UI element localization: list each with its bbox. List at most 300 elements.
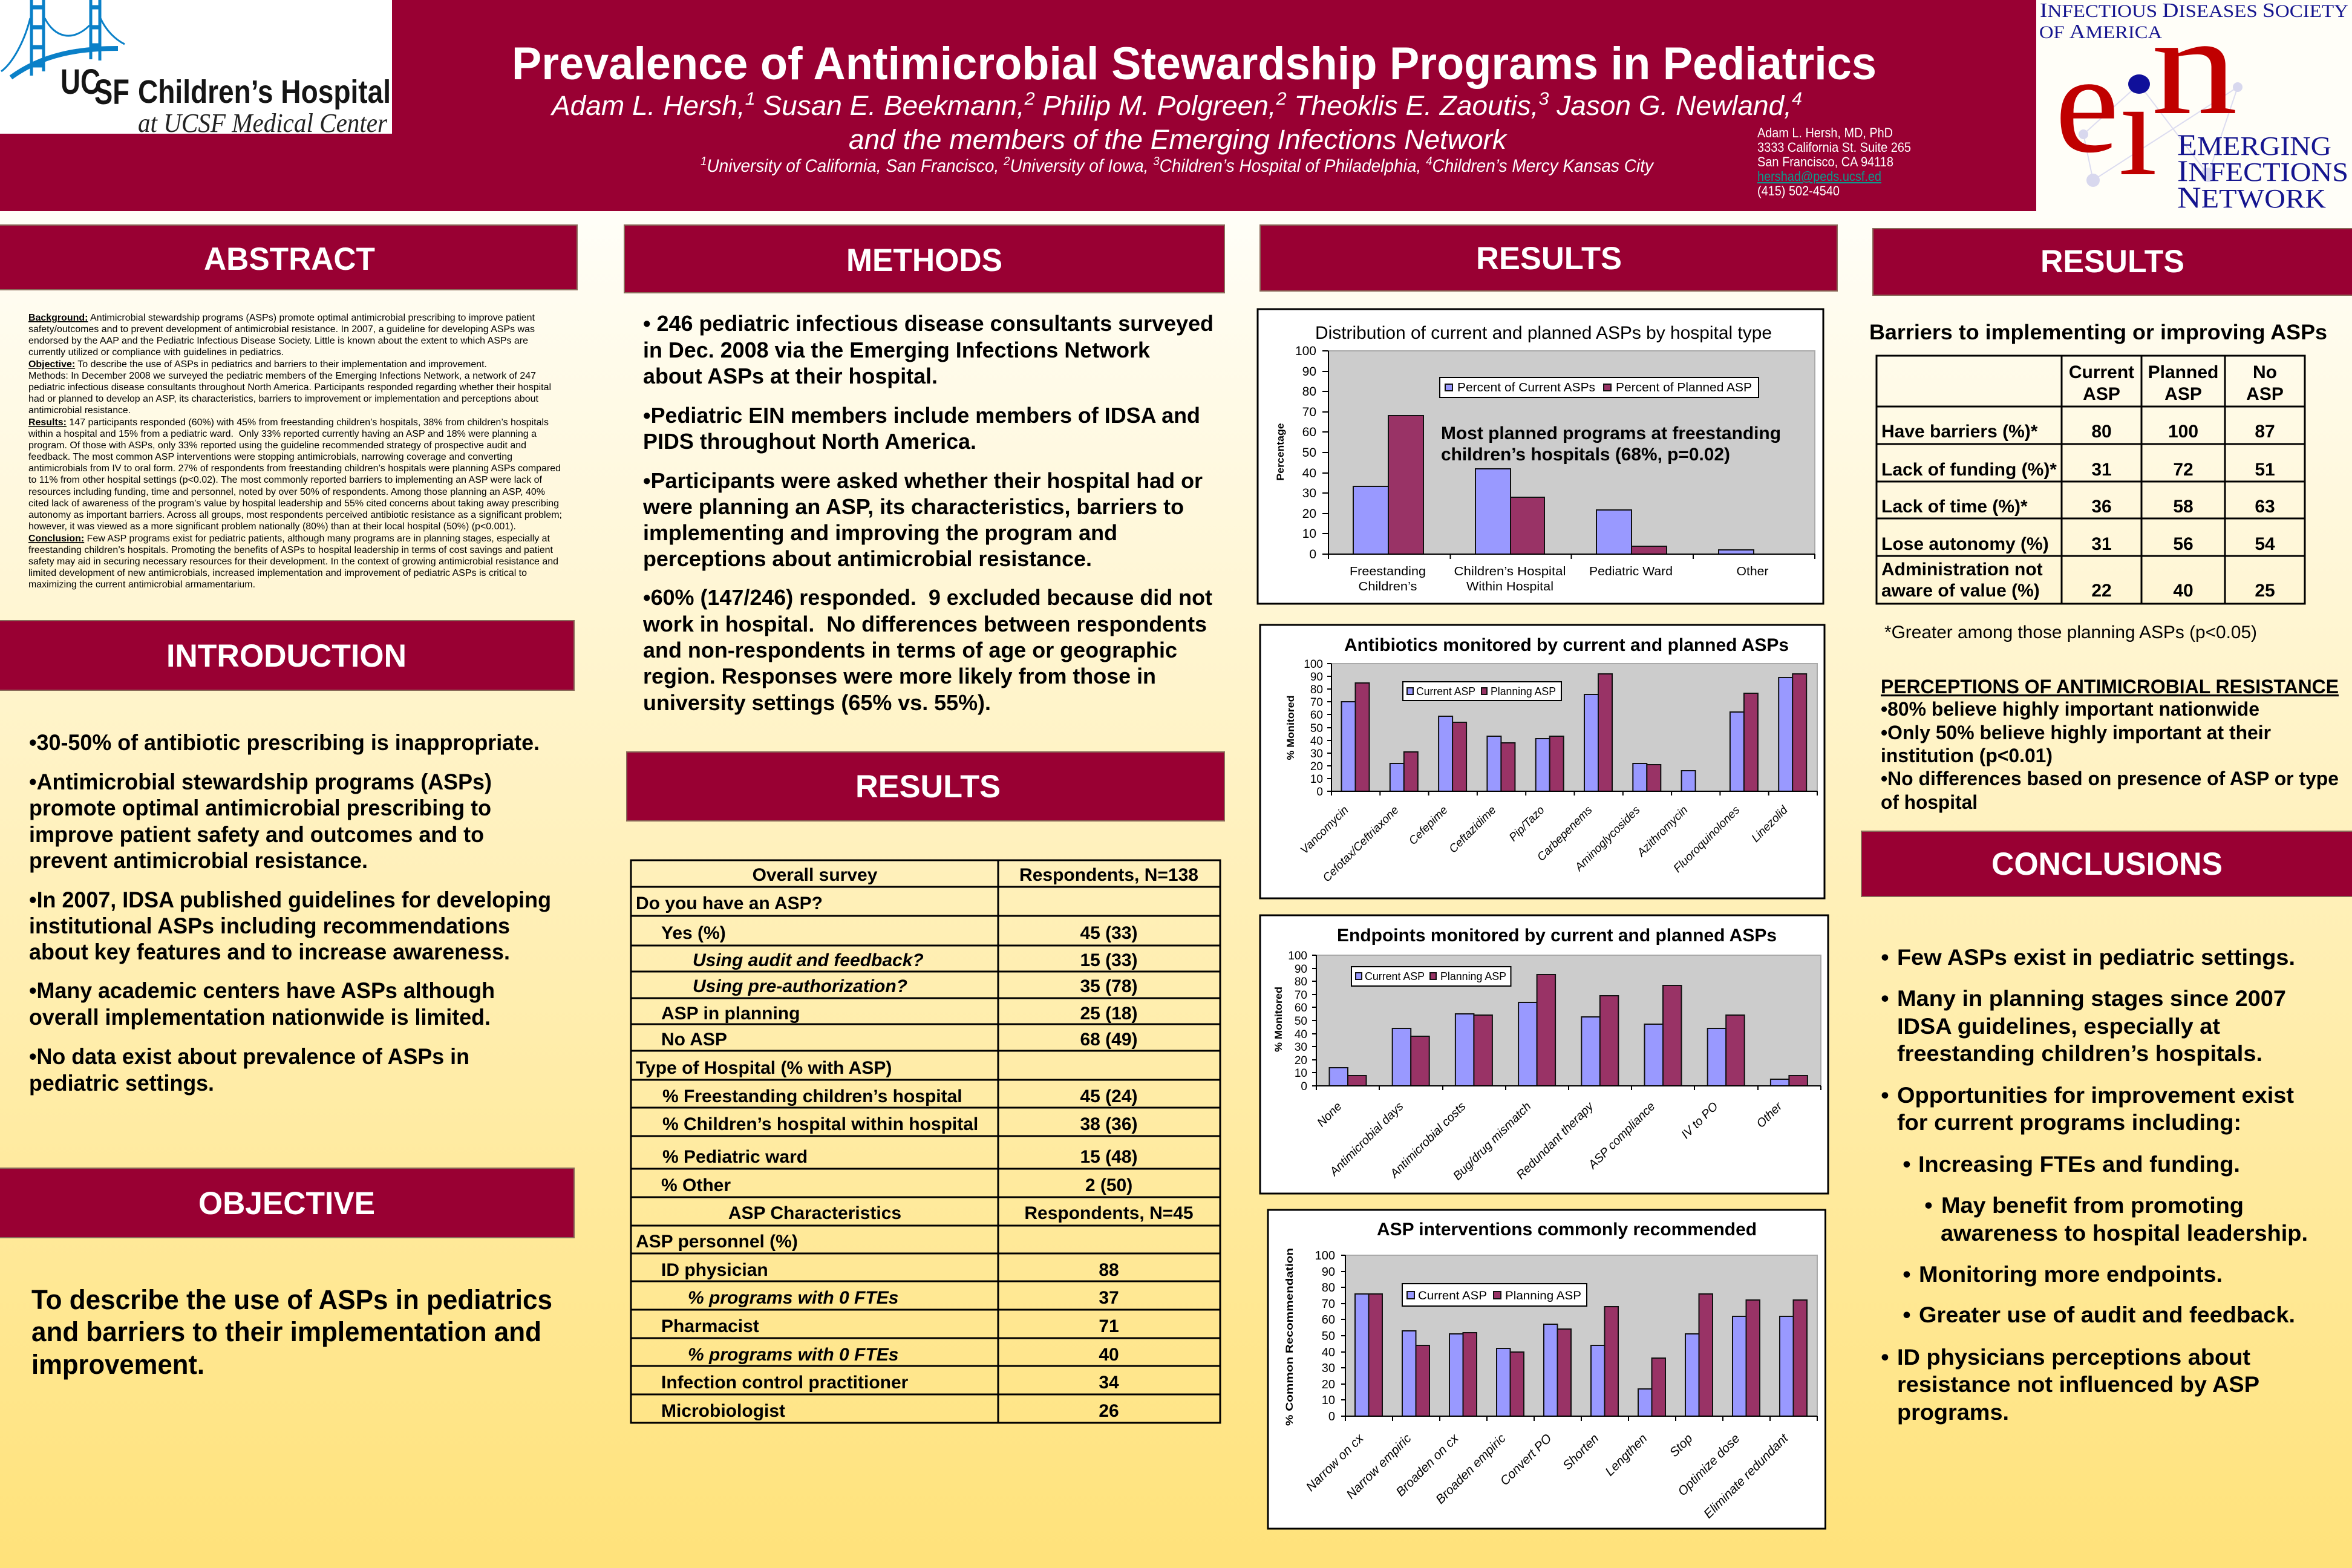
conclusions bullets: awareness to hospital leadership. — [1941, 1220, 2308, 1246]
panel: results heading, charts column — [1260, 225, 1837, 291]
contact details — [1757, 125, 1911, 198]
methods bullets: implementing and improving the program and — [643, 520, 1117, 545]
conclusions bullets: • — [1881, 985, 1889, 1011]
chart: distribution by hospital type: 90 — [1302, 365, 1316, 379]
table: overall survey and ASP characteristics: ASP Characteristics — [728, 1203, 901, 1223]
introduction bullets: •In 2007, IDSA published guidelines for developing — [29, 887, 551, 912]
chart: endpoints monitored: 40 — [1295, 1028, 1307, 1041]
chart: ASP interventions commonly recommended: 70 — [1322, 1298, 1335, 1311]
table: overall survey and ASP characteristics: 35 (78) — [1080, 976, 1138, 996]
methods bullets: university settings (65% vs. 55%). — [643, 690, 991, 715]
table: barriers: Lose autonomy (%) — [1881, 534, 2049, 554]
table: overall survey and ASP characteristics: % Other — [661, 1175, 731, 1195]
conclusions bullets: freestanding children’s hospitals. — [1897, 1040, 2262, 1066]
chart: endpoints monitored: 70 — [1295, 989, 1307, 1002]
chart: distribution by hospital type: 40 — [1302, 466, 1316, 480]
chart: distribution by hospital type: Most planned programs at freestanding — [1441, 423, 1781, 443]
header banner — [0, 0, 2036, 211]
panel: results heading, survey table — [627, 752, 1224, 821]
affiliations: University of Iowa, — [1010, 156, 1153, 176]
logo: UCSF Children's Hospital — [0, 0, 392, 138]
table: overall survey and ASP characteristics: 45 (33) — [1080, 923, 1138, 943]
chart: ASP interventions commonly recommended: Narrow empiric — [1344, 1431, 1414, 1501]
panel: abstract heading — [0, 225, 577, 290]
methods bullets: •60% (147/246) responded. 9 excluded because did not — [643, 585, 1212, 610]
abstract text block: pediatric infectious disease consultants throughout North America. Participants responded regarding whether their hospital — [28, 382, 551, 393]
chart: distribution by hospital type: 70 — [1302, 405, 1316, 419]
abstract text block: currently utilized or compliance with guidelines in pediatrics. — [28, 347, 284, 358]
title: Prevalence of Antimicrobial Stewardship Programs in Pediatrics — [512, 38, 1877, 90]
chart: antibiotics monitored: Cefotax/Ceftriaxone — [1321, 804, 1402, 884]
chart: distribution by hospital type: Other — [1736, 565, 1769, 578]
chart: endpoints monitored: 20 — [1295, 1054, 1307, 1067]
affiliations: 4 — [1426, 155, 1432, 168]
abstract text block: limited development of new antimicrobials, increased implementation and improvement of pediatric ASPs is critical to — [28, 568, 527, 578]
chart: antibiotics monitored: Aminoglycosides — [1572, 803, 1643, 874]
chart: antibiotics monitored: 50 — [1310, 722, 1323, 735]
table: overall survey and ASP characteristics: Using audit and feedback? — [693, 950, 924, 970]
table: overall survey and ASP characteristics: 26 — [1099, 1401, 1119, 1421]
conclusions bullets — [1881, 944, 2308, 1425]
chart: ASP interventions commonly recommended: Shorten — [1560, 1431, 1602, 1473]
table: barriers: Administration not — [1881, 560, 2043, 580]
chart: endpoints monitored: 80 — [1295, 976, 1307, 988]
chart: distribution by hospital type: Distribution of current and planned ASPs by hospital type — [1315, 323, 1772, 343]
icon: Golden Gate bridge — [1, 0, 125, 77]
table: overall survey and ASP characteristics: Microbiologist — [661, 1401, 785, 1421]
abstract text block: cited lack of awareness of the program’s value by hospital leadership and 55% cited concerns about taking away prescribing — [28, 498, 559, 509]
chart: ASP interventions commonly recommended: Planning ASP — [1505, 1290, 1581, 1302]
conclusions bullets: resistance not influenced by ASP — [1897, 1371, 2259, 1397]
chart: antibiotics monitored: 30 — [1310, 748, 1323, 760]
chart: endpoints monitored: IV to PO — [1679, 1100, 1721, 1142]
abstract text block: antimicrobial resistance. — [28, 405, 131, 416]
table footnote: *Greater among those planning ASPs (p<0.05) — [1884, 622, 2257, 642]
table: overall survey and ASP characteristics: 88 — [1099, 1260, 1119, 1280]
objective text: improvement. — [31, 1349, 204, 1380]
panel: introduction heading: INTRODUCTION — [166, 638, 407, 674]
table: overall survey and ASP characteristics: ID physician — [661, 1260, 768, 1280]
table: barriers: 36 — [2091, 497, 2112, 517]
objective text: and barriers to their implementation and — [31, 1316, 541, 1347]
methods bullets: region. Responses were more likely from those in — [643, 664, 1156, 688]
chart: antibiotics monitored: Ceftazidime — [1447, 804, 1499, 855]
conclusions bullets: • — [1881, 944, 1889, 970]
chart: ASP interventions commonly recommended: Lengthen — [1602, 1431, 1650, 1478]
abstract text block: Methods: In December 2008 we surveyed the pediatric members of the Emerging Infections Network, a network of 247 — [28, 371, 536, 381]
table: overall survey and ASP characteristics: 25 (18) — [1080, 1004, 1138, 1024]
table: barriers: Current — [2069, 362, 2134, 382]
chart: antibiotics monitored: % Monitored — [1285, 696, 1296, 760]
chart: endpoints monitored: Redundant therapy — [1514, 1099, 1596, 1182]
table: barriers: Lack of funding (%)* — [1881, 460, 2057, 480]
introduction bullets: •30-50% of antibiotic prescribing is inappropriate. — [29, 730, 540, 755]
chart: endpoints monitored: ASP compliance — [1586, 1100, 1658, 1172]
table: overall survey and ASP characteristics: 15 (33) — [1080, 950, 1138, 970]
table: overall survey and ASP characteristics: ASP personnel (%) — [636, 1232, 798, 1252]
affiliations: 3 — [1153, 155, 1160, 168]
abstract text block: freestanding children’s hospitals. Promoting the benefits of ASPs to hospital leadership in terms of cost savings and patient — [28, 545, 554, 555]
abstract text block: Objective: To describe the use of ASPs in pediatrics and barriers to their implementation and improvement. — [28, 359, 487, 370]
chart: distribution by hospital type: 0 — [1309, 547, 1316, 561]
abstract text block: autonomy as important barriers. Across all groups, most respondents perceived antibiotic resistance as a significant problem; — [28, 510, 562, 520]
chart: endpoints monitored: Endpoints monitored by current and planned ASPs — [1337, 926, 1777, 946]
table: overall survey and ASP characteristics: % programs with 0 FTEs — [688, 1345, 898, 1365]
conclusions bullets: Increasing FTEs and funding. — [1918, 1151, 2240, 1177]
chart: ASP interventions commonly recommended: Optimize dose — [1675, 1431, 1743, 1498]
table: overall survey and ASP characteristics: % Freestanding children’s hospital — [662, 1086, 962, 1106]
perceptions of antimicrobial resistance: •Only 50% believe highly important at their — [1881, 722, 2271, 743]
chart: ASP interventions commonly recommended: 100 — [1315, 1249, 1335, 1263]
methods bullets: about ASPs at their hospital. — [643, 364, 938, 388]
chart: ASP interventions commonly recommended: Current ASP — [1418, 1290, 1487, 1302]
table: barriers: ASP — [2164, 384, 2202, 404]
chart: antibiotics monitored: 60 — [1310, 709, 1323, 722]
abstract text block: safety may aid in securing necessary resources for their development. In the context of growing antimicrobial resistance and — [28, 557, 558, 567]
panel: conclusions heading: CONCLUSIONS — [1991, 846, 2223, 882]
conclusions bullets: Many in planning stages since 2007 — [1897, 985, 2286, 1011]
abstract text block: feedback. The most common ASP interventions were stopping antimicrobials, narrowing coverage and converting — [28, 452, 512, 462]
logo: IDSA and Emerging Infections Network: ı — [2118, 53, 2157, 204]
authors: 1 — [745, 89, 756, 109]
table: barriers: aware of value (%) — [1881, 581, 2040, 601]
table: overall survey and ASP characteristics: 34 — [1099, 1373, 1119, 1393]
table: overall survey and ASP characteristics: Type of Hospital (% with ASP) — [636, 1058, 892, 1078]
table: barriers: 63 — [2255, 497, 2275, 517]
abstract text block: safety/outcomes and to prevent development of antimicrobial resistance. In 2007, a guideline for developing ASPs was — [28, 324, 535, 335]
authors: Jason G. Newland, — [1549, 90, 1792, 121]
logo: UCSF Children's Hospital: at UCSF Medical Center — [138, 108, 388, 138]
table: overall survey and ASP characteristics: ASP in planning — [661, 1004, 800, 1024]
chart: distribution by hospital type: 30 — [1302, 486, 1316, 500]
chart: antibiotics monitored: Vancomycin — [1298, 804, 1351, 857]
table: barriers: 56 — [2173, 534, 2194, 554]
table: overall survey and ASP characteristics: 2 (50) — [1085, 1175, 1132, 1195]
chart: antibiotics monitored: Pip/Tazo — [1507, 804, 1547, 844]
contact details: San Francisco, CA 94118 — [1757, 154, 1893, 169]
panel: objective heading: OBJECTIVE — [198, 1186, 375, 1221]
abstract text block: had or planned to develop an ASP, its characteristics, barriers to improvement or implementation and perceptions about — [28, 394, 539, 404]
panel: results heading, barriers column: RESULTS — [2040, 244, 2184, 279]
affiliations: University of California, San Francisco, — [707, 156, 1004, 176]
chart: ASP interventions commonly recommended: Eliminate redundant — [1701, 1431, 1791, 1521]
contact details: hershad@peds.ucsf.ed — [1757, 169, 1881, 184]
chart: endpoints monitored: None — [1315, 1100, 1345, 1129]
table: overall survey and ASP characteristics: 68 (49) — [1080, 1030, 1138, 1050]
chart: endpoints monitored — [1260, 915, 1828, 1194]
chart: ASP interventions commonly recommended: Broaden empiric — [1433, 1431, 1509, 1507]
introduction bullets: pediatric settings. — [29, 1071, 214, 1096]
introduction bullets: •No data exist about prevalence of ASPs in — [29, 1044, 469, 1069]
chart: distribution by hospital type: Children’s Hospital — [1454, 565, 1566, 578]
chart: antibiotics monitored: 0 — [1316, 786, 1323, 799]
introduction bullets: institutional ASPs including recommendations — [29, 913, 510, 938]
authors: Adam L. Hersh, — [552, 90, 741, 121]
contact details: (415) 502-4540 — [1757, 183, 1840, 198]
introduction bullets: promote optimal antimicrobial prescribing to — [29, 795, 491, 820]
table: barriers: 31 — [2091, 534, 2112, 554]
logo: IDSA and Emerging Infections Network: OF AMERICA — [2039, 21, 2162, 43]
chart: distribution by hospital type: 60 — [1302, 425, 1316, 439]
table: overall survey and ASP characteristics: Respondents, N=45 — [1024, 1203, 1194, 1223]
conclusions bullets: Few ASPs exist in pediatric settings. — [1897, 944, 2295, 970]
perceptions of antimicrobial resistance: •No differences based on presence of ASP or type — [1881, 768, 2339, 789]
authors: Theoklis E. Zaoutis, — [1287, 90, 1538, 121]
introduction bullets: overall implementation nationwide is limited. — [29, 1005, 491, 1030]
table: barriers: Lack of time (%)* — [1881, 497, 2028, 517]
objective text: To describe the use of ASPs in pediatrics — [31, 1284, 552, 1315]
table: overall survey and ASP characteristics: % Pediatric ward — [662, 1147, 808, 1167]
conclusions bullets: • — [1903, 1151, 1911, 1177]
chart: distribution by hospital type: Freestanding — [1350, 565, 1426, 578]
chart: antibiotics monitored: Carbepenems — [1535, 803, 1595, 864]
chart: ASP interventions commonly recommended: 0 — [1328, 1410, 1335, 1423]
perceptions of antimicrobial resistance: PERCEPTIONS OF ANTIMICROBIAL RESISTANCE — [1881, 676, 2339, 697]
conclusions bullets: programs. — [1897, 1399, 2009, 1425]
affiliations: 1 — [701, 155, 707, 168]
abstract text block: Results: 147 participants responded (60%) with 45% from freestanding children’s hospitals, 38% from children’s hospitals — [28, 417, 549, 428]
methods bullets — [642, 311, 1214, 715]
introduction bullets: improve patient safety and outcomes and to — [29, 822, 484, 847]
introduction bullets: •Many academic centers have ASPs although — [29, 978, 495, 1003]
table: overall survey and ASP characteristics: Yes (%) — [661, 923, 726, 943]
introduction bullets: about key features and to increase awareness. — [29, 939, 510, 964]
table: barriers: Have barriers (%)* — [1881, 422, 2038, 442]
chart: antibiotics monitored — [1260, 625, 1824, 898]
methods bullets: • 246 pediatric infectious disease consultants surveyed — [643, 311, 1214, 336]
table: overall survey and ASP characteristics: 38 (36) — [1080, 1114, 1138, 1134]
chart: distribution by hospital type: 100 — [1295, 344, 1316, 358]
logo: IDSA and Emerging Infections Network: INFECTIOUS DISEASES SOCIETY — [2040, 0, 2348, 22]
conclusions bullets: • — [1924, 1192, 1933, 1218]
chart: antibiotics monitored: 10 — [1310, 773, 1323, 786]
panel: methods heading: METHODS — [846, 243, 1002, 278]
chart: antibiotics monitored: 80 — [1310, 684, 1323, 696]
abstract text block: resources including funding, time and personnel, noted by over 50% of respondents. Among those planning an ASP, 40% — [28, 487, 545, 497]
chart: ASP interventions commonly recommended: 40 — [1322, 1346, 1335, 1359]
chart: ASP interventions commonly recommended: 50 — [1322, 1330, 1335, 1343]
chart: endpoints monitored: Current ASP — [1365, 970, 1425, 982]
chart: antibiotics monitored: 100 — [1304, 658, 1323, 671]
table: barriers: ASP — [2083, 384, 2120, 404]
chart: ASP interventions commonly recommended: Narrow on cx — [1304, 1431, 1367, 1494]
conclusions bullets: Monitoring more endpoints. — [1919, 1261, 2223, 1287]
chart: endpoints monitored: Bug/drug mismatch — [1451, 1100, 1534, 1183]
chart: ASP interventions commonly recommended: 60 — [1322, 1313, 1335, 1327]
conclusions bullets: Greater use of audit and feedback. — [1919, 1302, 2295, 1327]
abstract text block: Background: Antimicrobial stewardship programs (ASPs) promote optimal antimicrobial prescribing to improve patient — [28, 313, 535, 323]
authors: 4 — [1792, 89, 1802, 109]
barriers heading: Barriers to implementing or improving ASPs — [1869, 321, 2327, 344]
table: overall survey and ASP characteristics: Respondents, N=138 — [1019, 865, 1198, 885]
affiliations: 2 — [1003, 155, 1010, 168]
chart: antibiotics monitored: Antibiotics monitored by current and planned ASPs — [1344, 635, 1789, 655]
chart: ASP interventions commonly recommended: Convert PO — [1498, 1431, 1555, 1488]
abstract text block: within a hospital and 15% from a pediatric ward. Only 33% reported currently having an ASP and 18% were planning a — [28, 429, 537, 439]
conclusions bullets: for current programs including: — [1897, 1109, 2241, 1135]
chart: distribution by hospital type: children’s hospitals (68%, p=0.02) — [1441, 445, 1730, 465]
abstract text block: antimicrobials from IV to oral form. 27% of respondents from freestanding children’s hospitals were planning ASPs compared — [28, 463, 561, 474]
chart: antibiotics monitored: 70 — [1310, 696, 1323, 709]
conclusions bullets: • — [1903, 1302, 1911, 1327]
table: barriers: 87 — [2255, 422, 2275, 442]
chart: distribution by hospital type: 20 — [1302, 507, 1316, 521]
methods bullets: in Dec. 2008 via the Emerging Infections Network — [643, 338, 1151, 362]
authors: Susan E. Beekmann, — [756, 90, 1025, 121]
perceptions of antimicrobial resistance — [1881, 676, 2339, 813]
chart: ASP interventions commonly recommended: 20 — [1322, 1378, 1335, 1391]
chart: distribution by hospital type: Pediatric Ward — [1589, 565, 1673, 578]
table: barriers: 100 — [2168, 422, 2198, 442]
objective text — [31, 1284, 552, 1380]
chart: distribution by hospital type — [1258, 309, 1823, 604]
chart: antibiotics monitored: Current ASP — [1416, 685, 1475, 697]
chart: distribution by hospital type: Percent of Planned ASP — [1616, 381, 1752, 394]
chart: endpoints monitored: Planning ASP — [1440, 970, 1506, 982]
methods bullets: PIDS throughout North America. — [643, 429, 976, 454]
methods bullets: work in hospital. No differences between respondents — [642, 612, 1207, 636]
affiliations: Children’s Mercy Kansas City — [1432, 156, 1655, 176]
table: overall survey and ASP characteristics: 45 (24) — [1080, 1086, 1138, 1106]
table: barriers: 31 — [2091, 460, 2112, 480]
panel: conclusions heading — [1861, 831, 2352, 897]
table: barriers: 40 — [2173, 581, 2194, 601]
chart: distribution by hospital type: Children’s — [1359, 580, 1417, 593]
perceptions of antimicrobial resistance: •80% believe highly important nationwide — [1881, 698, 2259, 720]
chart: ASP interventions commonly recommended: % Common Recommendation — [1284, 1248, 1295, 1426]
conclusions bullets: • — [1903, 1261, 1911, 1287]
table: overall survey and ASP characteristics — [631, 860, 1220, 1423]
logo: IDSA and Emerging Infections Network: NETWORK — [2177, 180, 2326, 214]
table: barriers: 51 — [2255, 460, 2275, 480]
chart: distribution by hospital type: Percent of Current ASPs — [1457, 381, 1595, 394]
conclusions bullets: Opportunities for improvement exist — [1897, 1082, 2295, 1108]
conclusions bullets: May benefit from promoting — [1941, 1192, 2244, 1218]
panel: results heading, charts column: RESULTS — [1476, 241, 1622, 276]
chart: antibiotics monitored: Fluoroquinolones — [1671, 803, 1743, 875]
logo: IDSA and Emerging Infections Network: INFECTIONS — [2177, 154, 2348, 188]
table: overall survey and ASP characteristics: Do you have an ASP? — [636, 893, 823, 913]
panel: results heading, survey table: RESULTS — [855, 769, 1001, 805]
chart: endpoints monitored: % Monitored — [1273, 987, 1284, 1052]
table: barriers: 58 — [2173, 497, 2194, 517]
introduction bullets — [29, 730, 551, 1096]
table: overall survey and ASP characteristics: No ASP — [661, 1030, 727, 1050]
chart: distribution by hospital type: Percentage — [1275, 423, 1286, 480]
panel: objective heading — [0, 1168, 574, 1238]
chart: antibiotics monitored: 40 — [1310, 735, 1323, 748]
abstract text block: program. Of those with ASPs, only 33% reported using the guideline recommended strategy of prospective audit and — [28, 440, 526, 451]
chart: endpoints monitored: 60 — [1295, 1002, 1307, 1014]
panel: abstract heading: ABSTRACT — [204, 241, 375, 277]
chart: distribution by hospital type: 80 — [1302, 385, 1316, 399]
table: barriers: 25 — [2255, 581, 2275, 601]
chart: ASP interventions commonly recommended: 80 — [1322, 1281, 1335, 1295]
methods bullets: •Participants were asked whether their hospital had or — [643, 468, 1203, 493]
table: barriers: 54 — [2255, 534, 2275, 554]
methods bullets: •Pediatric EIN members include members of IDSA and — [643, 403, 1200, 428]
chart: antibiotics monitored: 20 — [1310, 760, 1323, 773]
table: barriers: 80 — [2091, 422, 2112, 442]
chart: endpoints monitored: Other — [1754, 1099, 1785, 1131]
chart: ASP interventions commonly recommended: ASP interventions commonly recommended — [1377, 1220, 1757, 1240]
chart: antibiotics monitored: Planning ASP — [1491, 685, 1556, 697]
chart: antibiotics monitored: Linezolid — [1749, 803, 1791, 845]
table: overall survey and ASP characteristics: % programs with 0 FTEs — [688, 1288, 898, 1308]
logo: IDSA and Emerging Infections Network: EMERGING — [2177, 128, 2331, 162]
authors: 2 — [1024, 89, 1035, 109]
logo: UCSF Children's Hospital: Children’s Hospital — [138, 74, 391, 110]
chart: antibiotics monitored: 90 — [1310, 671, 1323, 684]
conclusions bullets: IDSA guidelines, especially at — [1897, 1013, 2221, 1039]
chart: ASP interventions commonly recommended — [1268, 1210, 1826, 1529]
table: overall survey and ASP characteristics: 40 — [1099, 1345, 1119, 1365]
table: barriers: No — [2253, 362, 2277, 382]
chart: ASP interventions commonly recommended: Stop — [1667, 1431, 1696, 1460]
chart: distribution by hospital type: Within Hospital — [1466, 580, 1553, 593]
chart: distribution by hospital type: 50 — [1302, 446, 1316, 460]
introduction bullets: prevent antimicrobial resistance. — [29, 848, 368, 873]
logo: UCSF Children's Hospital: SF — [94, 73, 129, 112]
contact details: Adam L. Hersh, MD, PhD — [1757, 125, 1893, 140]
table: overall survey and ASP characteristics: 15 (48) — [1080, 1147, 1138, 1167]
table: overall survey and ASP characteristics: Overall survey — [753, 865, 878, 885]
chart: distribution by hospital type: 10 — [1302, 527, 1316, 541]
table: overall survey and ASP characteristics: Using pre-authorization? — [693, 976, 907, 996]
chart: antibiotics monitored: Cefepime — [1406, 804, 1451, 848]
authors: 2 — [1276, 89, 1287, 109]
chart: ASP interventions commonly recommended: 30 — [1322, 1362, 1335, 1375]
chart: endpoints monitored: 50 — [1295, 1015, 1307, 1028]
logo: IDSA and Emerging Infections Network: e — [2055, 25, 2119, 182]
methods bullets: were planning an ASP, its characteristics, barriers to — [642, 494, 1184, 519]
contact details: 3333 California St. Suite 265 — [1757, 140, 1911, 155]
authors: Philip M. Polgreen, — [1035, 90, 1276, 121]
logo wordmark: UC — [60, 62, 100, 102]
affiliations: Children’s Hospital of Philadelphia, — [1160, 156, 1426, 176]
table: barriers: 22 — [2091, 581, 2112, 601]
panel: introduction heading — [0, 621, 574, 690]
chart: endpoints monitored: Antimicrobial days — [1327, 1100, 1406, 1179]
conclusions bullets: • — [1881, 1082, 1889, 1108]
abstract text block: however, it was viewed as a more significant problem nationally (80%) than at their local hospital (50%) (p<0.001). — [28, 521, 516, 532]
panel: results heading, barriers column — [1873, 229, 2352, 295]
table: overall survey and ASP characteristics: 71 — [1099, 1316, 1119, 1336]
chart: endpoints monitored: 10 — [1295, 1067, 1307, 1080]
chart: antibiotics monitored: Azithromycin — [1635, 804, 1691, 860]
abstract text block: maximizing the current antimicrobial armamentarium. — [28, 580, 255, 590]
abstract text block — [28, 313, 562, 590]
table: overall survey and ASP characteristics: % Children’s hospital within hospital — [662, 1114, 978, 1134]
logo: IDSA and Emerging Infections Network — [2036, 0, 2352, 214]
table: overall survey and ASP characteristics: 37 — [1099, 1288, 1119, 1308]
conclusions bullets: ID physicians perceptions about — [1897, 1344, 2251, 1370]
table: overall survey and ASP characteristics: Pharmacist — [661, 1316, 759, 1336]
chart: endpoints monitored: 0 — [1301, 1080, 1307, 1093]
conclusions bullets: • — [1881, 1344, 1889, 1370]
authors: 3 — [1538, 89, 1549, 109]
chart: endpoints monitored: Antimicrobial costs — [1387, 1100, 1469, 1181]
collaborators: and the members of the Emerging Infections Network — [849, 124, 1508, 155]
table: barriers — [1877, 356, 2305, 604]
chart: ASP interventions commonly recommended: Broaden on cx — [1394, 1431, 1462, 1499]
chart: ASP interventions commonly recommended: 10 — [1322, 1394, 1335, 1407]
abstract text block: endorsed by the AAP and the Pediatric Infectious Disease Society. Little is known about the extent to which ASPs are — [28, 336, 528, 346]
perceptions of antimicrobial resistance: institution (p<0.01) — [1881, 745, 2053, 766]
abstract text block: to 11% from other hospital settings (p<0.02). The most commonly reported barriers to implementing an ASP were lack of — [28, 475, 543, 485]
methods bullets: perceptions about antimicrobial resistance. — [643, 546, 1092, 571]
chart: endpoints monitored: 90 — [1295, 963, 1307, 976]
